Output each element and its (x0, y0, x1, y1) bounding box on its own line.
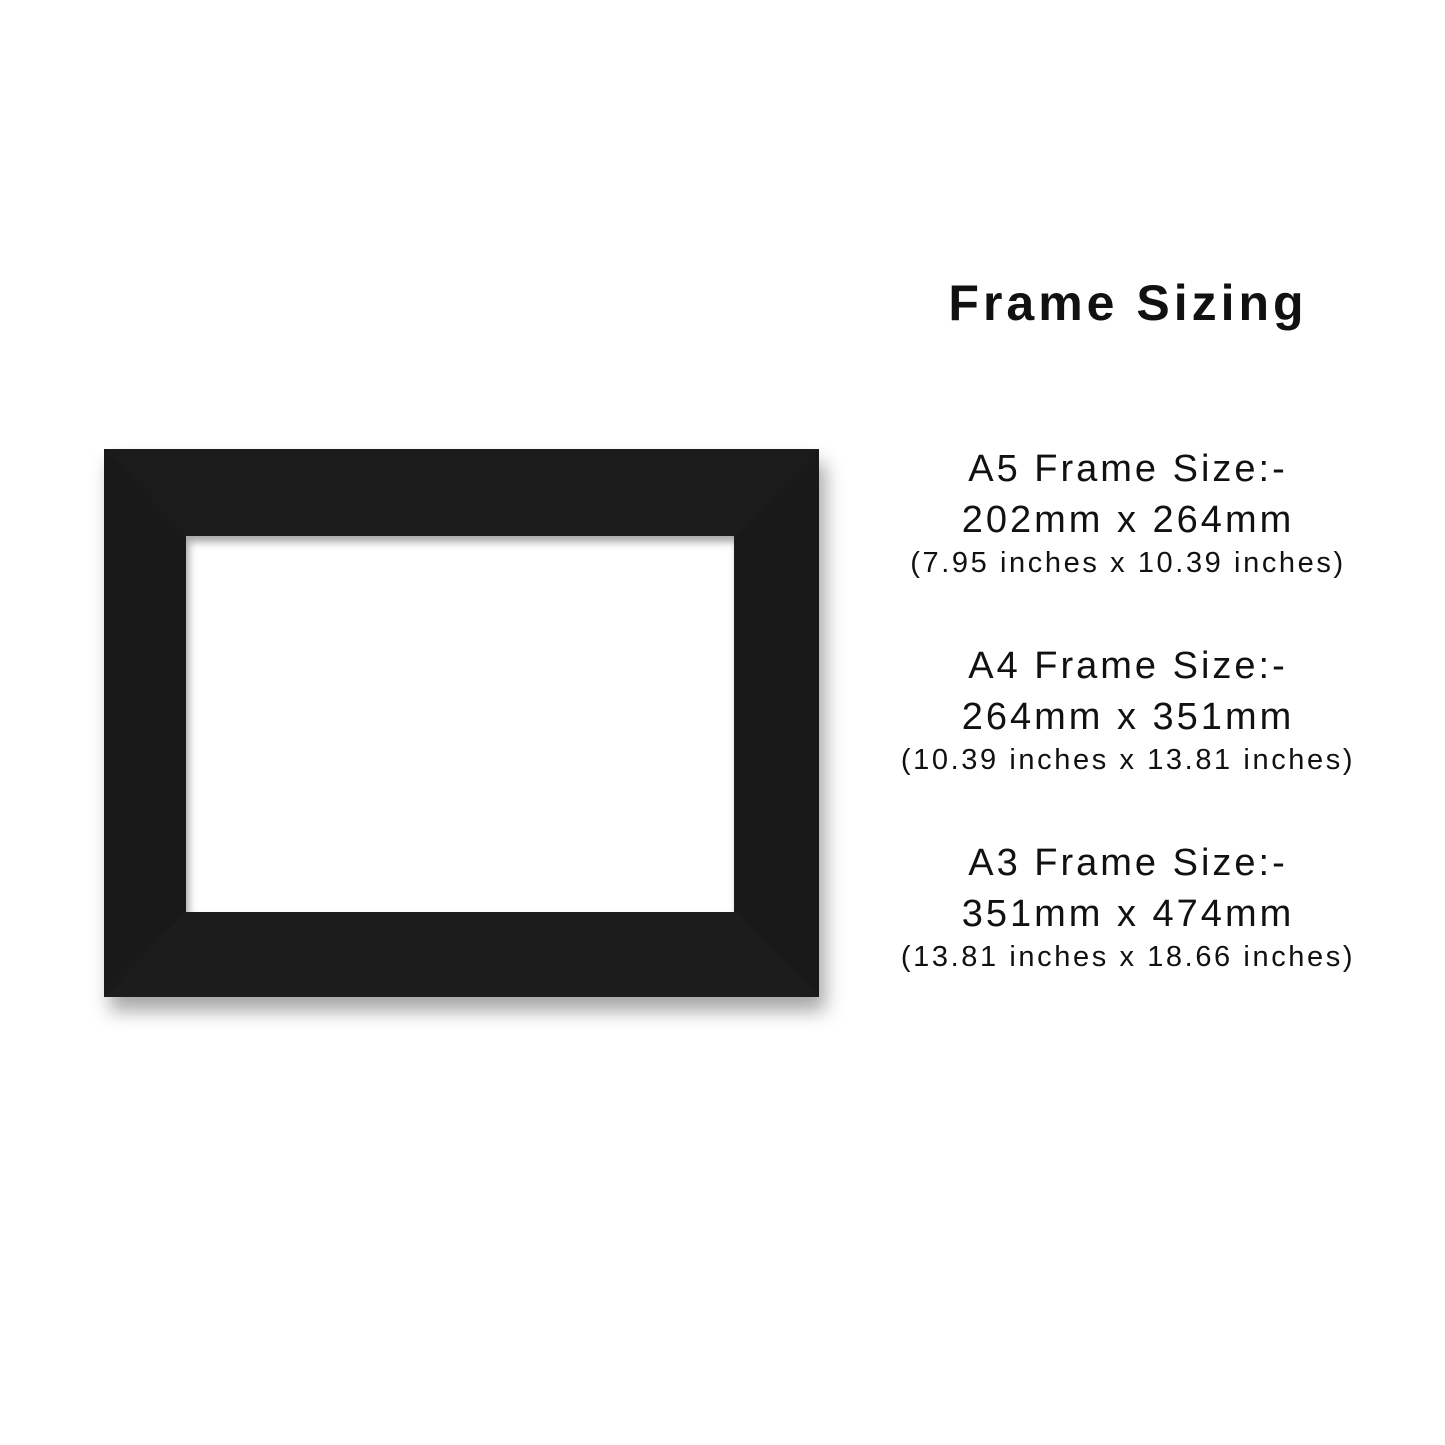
A3 size block: (13.81 inches x 18.66 inches) (901, 941, 1355, 973)
A5 size block: (7.95 inches x 10.39 inches) (910, 547, 1346, 579)
frame mitred corners (104, 449, 819, 997)
A3 size block (901, 842, 1355, 973)
A4 size block (901, 645, 1355, 776)
frame opening (186, 536, 734, 912)
A4 size block: 264mm x 351mm (962, 696, 1294, 738)
title: Frame Sizing (948, 275, 1308, 331)
A4 size block: (10.39 inches x 13.81 inches) (901, 744, 1355, 776)
A3 size block: 351mm x 474mm (962, 893, 1294, 935)
A5 size block: 202mm x 264mm (962, 499, 1294, 541)
A4 size block: A4 Frame Size:- (968, 645, 1288, 687)
frame illustration (104, 449, 819, 997)
A5 size block: A5 Frame Size:- (968, 448, 1288, 490)
A5 size block (910, 448, 1346, 579)
A3 size block: A3 Frame Size:- (968, 842, 1288, 884)
